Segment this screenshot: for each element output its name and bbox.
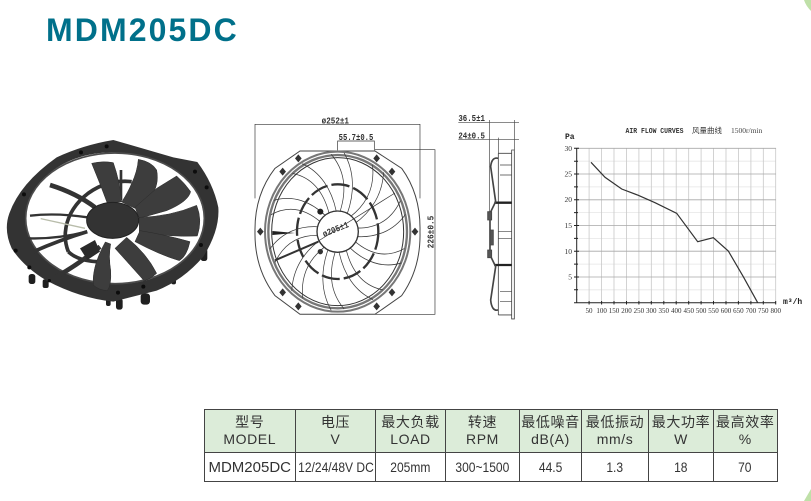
dimension labels: ø252±1 bbox=[322, 116, 349, 126]
axes bbox=[574, 148, 776, 304]
dimension labels: ø205±1 bbox=[321, 220, 351, 240]
air flow chart bbox=[564, 125, 802, 315]
table header row: 最高效率 bbox=[716, 414, 774, 430]
y axis labels: 10 bbox=[564, 247, 572, 256]
chart speed: 1500r/min bbox=[731, 126, 762, 135]
x axis labels: 150 bbox=[609, 307, 620, 315]
table header row: 最低噪音 bbox=[521, 414, 580, 430]
mounting pegs bbox=[29, 248, 207, 310]
dimension labels: 36.5±1 bbox=[458, 114, 485, 124]
frame body bbox=[498, 153, 512, 315]
hub bbox=[317, 211, 358, 252]
fan product image bbox=[7, 140, 218, 310]
x axis labels: 600 bbox=[721, 307, 732, 315]
table data row: MDM205DC bbox=[208, 458, 291, 476]
table data row: 18 bbox=[674, 459, 688, 475]
x axis labels: 50 bbox=[586, 307, 593, 315]
frame screw holes bbox=[14, 144, 209, 295]
x axis labels: 300 bbox=[646, 307, 657, 315]
dimension labels bbox=[458, 114, 485, 142]
x axis labels: 500 bbox=[696, 307, 707, 315]
front dimension drawing bbox=[255, 116, 437, 314]
chart title: AIR FLOW CURVES bbox=[626, 128, 684, 136]
air flow curve bbox=[591, 162, 758, 303]
frame inner rim bbox=[26, 153, 204, 284]
table data row: 1.3 bbox=[607, 459, 623, 475]
flange bbox=[512, 150, 514, 319]
table data row: 205mm bbox=[390, 459, 431, 475]
support spokes bbox=[28, 170, 132, 277]
table header row: LOAD bbox=[390, 431, 431, 447]
x axis labels: 800 bbox=[770, 307, 781, 315]
motor lugs bbox=[317, 209, 323, 215]
fan frame ring bbox=[7, 140, 218, 302]
side dimension drawing bbox=[458, 114, 519, 319]
table header row: % bbox=[739, 431, 752, 447]
y axis unit: Pa bbox=[565, 133, 575, 142]
x axis labels: 100 bbox=[596, 307, 607, 315]
light strip detail bbox=[41, 219, 85, 228]
dimension lines bbox=[458, 120, 519, 212]
x axis labels: 750 bbox=[758, 307, 769, 315]
hub bbox=[87, 202, 139, 238]
table header row bbox=[205, 410, 777, 476]
dimension labels: 55.7±0.5 bbox=[339, 133, 373, 143]
table header row: V bbox=[331, 431, 340, 447]
frame rings bbox=[265, 152, 410, 312]
x axis labels: 650 bbox=[733, 307, 744, 315]
spec table bbox=[204, 409, 778, 482]
table header row: 最大功率 bbox=[652, 414, 710, 430]
y axis labels: 30 bbox=[564, 144, 572, 153]
table header row: 转速 bbox=[468, 414, 497, 430]
blade profile bbox=[490, 158, 498, 310]
title: MDM205DC bbox=[46, 12, 239, 48]
frame outline bbox=[255, 151, 420, 314]
left blade highlight bbox=[272, 231, 295, 235]
x axis unit: m³/h bbox=[783, 298, 802, 307]
x axis labels: 200 bbox=[621, 307, 632, 315]
dimension labels: 226±0.5 bbox=[427, 216, 437, 248]
x axis labels: 550 bbox=[708, 307, 719, 315]
table header row: 最大负载 bbox=[381, 414, 440, 430]
dimension labels: 24±0.5 bbox=[458, 132, 485, 142]
table data row: 70 bbox=[739, 459, 752, 475]
motor bracket bbox=[80, 240, 100, 260]
table header row: mm/s bbox=[597, 431, 633, 447]
y axis labels bbox=[564, 144, 572, 282]
dimension lines bbox=[255, 124, 435, 314]
table header row: 最低振动 bbox=[586, 414, 644, 430]
table header row: RPM bbox=[466, 431, 499, 447]
chart title chinese: 风量曲线 bbox=[692, 125, 722, 135]
table header row: dB(A) bbox=[531, 431, 570, 447]
corner accents bbox=[804, 0, 811, 501]
table data row: 44.5 bbox=[539, 459, 562, 475]
fan blades bbox=[92, 159, 200, 291]
table header row: W bbox=[674, 431, 688, 447]
y axis labels: 15 bbox=[564, 221, 572, 230]
x axis labels: 700 bbox=[746, 307, 757, 315]
x axis labels: 400 bbox=[671, 307, 682, 315]
fan blades bbox=[267, 153, 408, 310]
table header row: 型号 bbox=[235, 414, 264, 430]
table data row bbox=[208, 458, 752, 476]
y axis labels: 20 bbox=[564, 195, 572, 204]
y axis labels: 5 bbox=[568, 272, 572, 282]
x axis labels: 450 bbox=[683, 307, 694, 315]
x axis labels: 250 bbox=[634, 307, 645, 315]
x axis labels bbox=[586, 307, 781, 315]
dimension labels bbox=[321, 116, 437, 248]
table data row: 12/24/48V DC bbox=[298, 459, 373, 475]
x axis labels: 350 bbox=[659, 307, 670, 315]
mounting holes bbox=[257, 154, 418, 310]
table header row: 电压 bbox=[321, 414, 350, 430]
table header row: MODEL bbox=[223, 431, 276, 447]
y axis labels: 25 bbox=[564, 170, 572, 178]
hub block bbox=[488, 212, 493, 258]
table data row: 300~1500 bbox=[456, 459, 509, 475]
